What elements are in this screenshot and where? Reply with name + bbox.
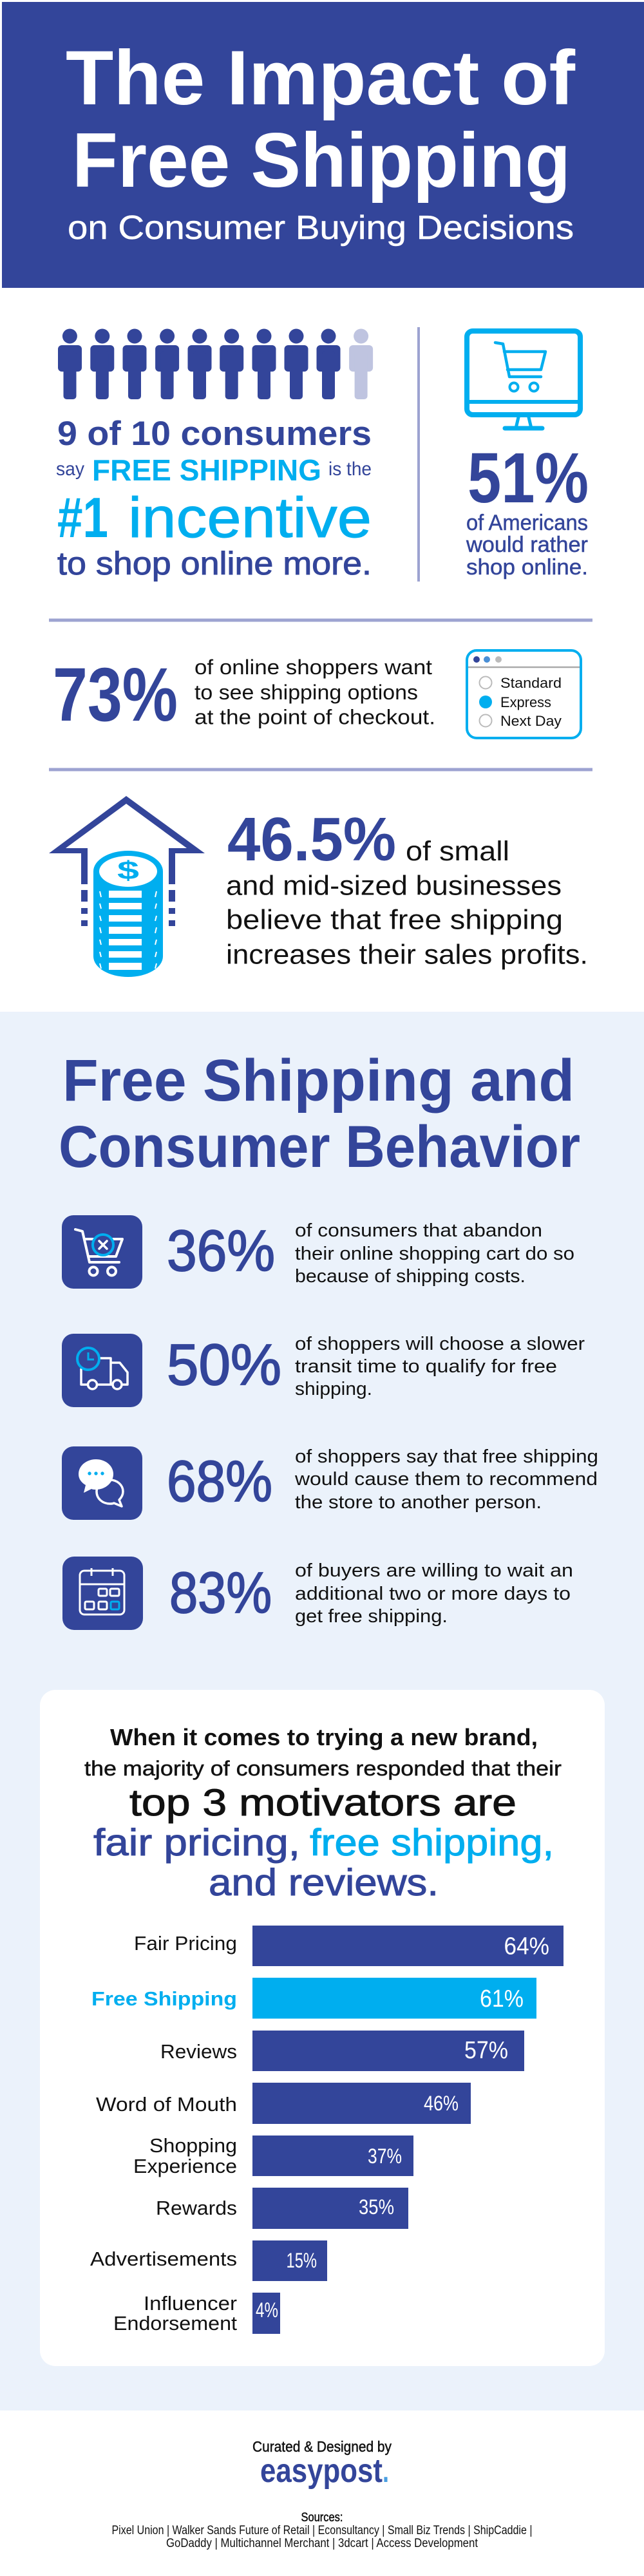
- icon: up arrow with coin stack: [49, 796, 205, 977]
- text: of small and mid-sized businesses: of small: [406, 836, 509, 867]
- logo: easypost: easypost: [260, 2452, 383, 2490]
- heading: top 3 motivators: [93, 1782, 554, 1904]
- text: slower transit: shipping.: [295, 1379, 372, 1399]
- bar: reviews 57%: 57%: [464, 2037, 508, 2064]
- panel: 46.5 percent businesses: [49, 796, 588, 977]
- footer: [112, 2438, 532, 2550]
- panel: top 3 motivators card: [40, 1690, 605, 2366]
- heading: top 3 motivators: top 3 motivators are: [129, 1782, 516, 1824]
- headline: #1 incentive: #1: [57, 486, 108, 549]
- text: wait for free shipping: get free shipping.: [295, 1606, 448, 1627]
- stat: 73%: 73%: [53, 652, 178, 737]
- panel: free shipping and consumer behavior: [0, 1012, 644, 2410]
- title: The Impact of: [66, 35, 576, 121]
- intro text: the majority of consumers responded that their: [84, 1757, 562, 1780]
- intro text: When it comes to trying a new brand,: [110, 1724, 538, 1750]
- intro text: [84, 1724, 562, 1780]
- text: shipping options at checkout: at the point of checkout.: [194, 706, 435, 729]
- text: abandon cart: their online shopping cart do so: [295, 1244, 574, 1264]
- bar: rewards 35%: Rewards: [156, 2197, 237, 2219]
- icon: row of ten people: [58, 328, 373, 399]
- bar: influencer endorsement 4%: Endorsement: [113, 2312, 237, 2334]
- row: 36 percent abandon cart: [62, 1215, 574, 1289]
- stat: 46.5%: 46.5%: [227, 805, 396, 874]
- row: 83 percent wait: [62, 1557, 573, 1630]
- stat: 68%: 68%: [167, 1450, 272, 1514]
- icon: up arrow with coin stack: $: [117, 857, 139, 885]
- text: to shop online more: to shop online more.: [57, 545, 372, 582]
- sources: [112, 2511, 532, 2550]
- text: abandon cart: because of shipping costs.: [295, 1266, 526, 1287]
- panel: 9 of 10 consumers: [56, 328, 373, 582]
- headline: 9 of 10 consumers: 9 of 10 consumers: [57, 415, 372, 453]
- heading: top 3 motivators: and reviews.: [209, 1862, 439, 1904]
- text: wait for free shipping: additional two or more days to: [295, 1584, 571, 1604]
- text: of small and mid-sized businesses: [226, 836, 588, 970]
- stat: 36%: 36%: [167, 1219, 275, 1283]
- bar: fair pricing 64%: [134, 1926, 564, 1966]
- stat: 83%: 83%: [169, 1561, 272, 1625]
- text: of small and mid-sized businesses: and mid-sized businesses: [226, 871, 562, 902]
- bar: word of mouth 46%: [96, 2083, 471, 2124]
- text: say free shipping is the: is the: [328, 459, 372, 480]
- heading: Free Shipping and: [62, 1048, 574, 1113]
- text: wait for free shipping: [295, 1560, 573, 1627]
- bar: influencer endorsement 4%: [113, 2292, 280, 2334]
- subtitle: on Consumer Buying Decisions: [68, 209, 574, 247]
- logo: easypost: .: [383, 2452, 389, 2490]
- stat: 51%: 51%: [468, 439, 589, 518]
- header banner: [2, 2, 644, 288]
- icon: chat bubbles: [62, 1446, 142, 1520]
- heading: Consumer Behavior: [59, 1114, 580, 1180]
- text: abandon cart: of consumers that abandon: [295, 1220, 542, 1241]
- text: of Americans would rather shop online: would rather: [466, 533, 588, 557]
- bar: reviews 57%: Reviews: [160, 2040, 237, 2063]
- sources: Sources:: [301, 2511, 343, 2524]
- text: of Americans would rather shop online: of Americans: [466, 511, 588, 535]
- bar: free shipping 61%: 61%: [480, 1985, 524, 2012]
- icon: shipping options window: Next Day: [500, 713, 562, 729]
- bar: advertisements 15%: Advertisements: [90, 2248, 237, 2270]
- bar: advertisements 15%: 15%: [286, 2249, 317, 2272]
- bar: fair pricing 64%: Fair Pricing: [134, 1932, 237, 1955]
- text: of small and mid-sized businesses: increases their sales profits.: [226, 939, 588, 970]
- heading: top 3 motivators: free shipping,: [310, 1822, 554, 1864]
- text: say free shipping is the: say: [56, 459, 84, 480]
- sources: Pixel Union | Walker Sands Future of Retail | Econsultancy | Small Biz Trends | ShipCaddie |: [112, 2524, 532, 2537]
- text: say free shipping is the: FREE SHIPPING: [92, 453, 321, 487]
- row: 68 percent recommend: [62, 1446, 598, 1520]
- heading: top 3 motivators: fair pricing,: [93, 1822, 300, 1864]
- bar: free shipping 61%: [91, 1978, 536, 2018]
- sources: GoDaddy | Multichannel Merchant | 3dcart | Access Development: [166, 2537, 478, 2550]
- bar chart: [90, 1926, 564, 2334]
- bar: influencer endorsement 4%: Influencer: [144, 2292, 237, 2315]
- text: shipping options at checkout: [194, 656, 435, 729]
- credit line: Curated & Designed by: [252, 2438, 392, 2455]
- text: recommend: [294, 1446, 598, 1513]
- title: Free Shipping: [72, 117, 571, 204]
- bar: advertisements 15%: [90, 2240, 327, 2281]
- row: 50 percent slower transit: [62, 1333, 585, 1407]
- bar: reviews 57%: [160, 2031, 524, 2071]
- bar: shopping experience 37%: Experience: [133, 2155, 237, 2177]
- bar: word of mouth 46%: 46%: [424, 2092, 459, 2115]
- bar: rewards 35%: 35%: [359, 2195, 394, 2219]
- stat: 50%: 50%: [167, 1333, 281, 1397]
- bar: free shipping 61%: Free Shipping: [91, 1987, 237, 2010]
- icon: monitor with cart: [467, 331, 580, 428]
- text: slower transit: [295, 1334, 585, 1399]
- text: slower transit: of shoppers will choose a slower: [295, 1334, 585, 1354]
- bar: fair pricing 64%: 64%: [504, 1933, 549, 1960]
- heading: [59, 1048, 580, 1180]
- icon: truck with clock: [62, 1334, 142, 1407]
- icon: cart with x: [62, 1215, 142, 1289]
- text: of small and mid-sized businesses: believe that free shipping: [226, 904, 563, 935]
- headline: #1 incentive: incentive: [128, 486, 372, 549]
- panel: 51 percent shop online: [466, 331, 589, 580]
- text: recommend: of shoppers say that free shipping: [295, 1446, 598, 1467]
- bar: shopping experience 37%: 37%: [368, 2145, 402, 2168]
- bar: shopping experience 37%: [133, 2134, 413, 2177]
- bar: influencer endorsement 4%: 4%: [256, 2298, 278, 2322]
- text: wait for free shipping: of buyers are willing to wait an: [295, 1560, 573, 1581]
- text: shipping options at checkout: of online shoppers want: [194, 656, 432, 679]
- text: of Americans would rather shop online: shop online.: [466, 555, 588, 580]
- icon: shipping options window: Express: [500, 694, 551, 710]
- panel: 73 percent shipping options: [53, 650, 581, 738]
- bar: word of mouth 46%: Word of Mouth: [96, 2093, 237, 2116]
- bar: rewards 35%: [156, 2188, 408, 2229]
- text: shipping options at checkout: to see shipping options: [194, 681, 418, 704]
- text: recommend: would cause them to recommend: [294, 1469, 598, 1490]
- icon: shipping options window: Standard: [500, 675, 562, 691]
- bar: shopping experience 37%: Shopping: [149, 2134, 237, 2157]
- text: slower transit: transit time to qualify for free: [295, 1356, 557, 1377]
- icon: shipping options window: [467, 650, 581, 738]
- text: abandon cart: [295, 1220, 574, 1287]
- text: recommend: the store to another person.: [295, 1492, 542, 1513]
- icon: calendar: [62, 1557, 143, 1630]
- text: of Americans would rather shop online: [466, 511, 588, 580]
- title: [66, 35, 576, 204]
